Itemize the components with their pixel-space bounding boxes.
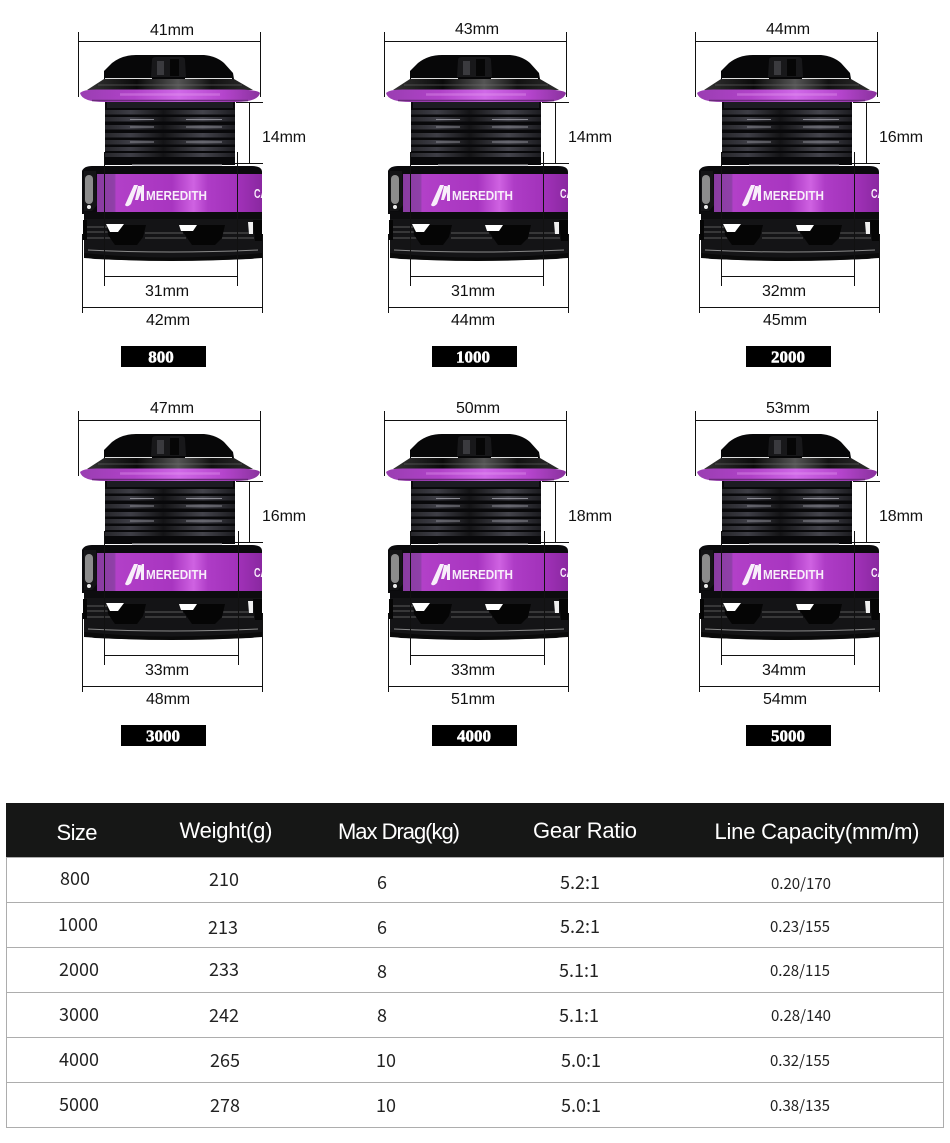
row 800: 0.20/170	[771, 873, 831, 894]
table header: Gear Ratio	[533, 818, 637, 843]
size badge	[432, 725, 517, 746]
brand text	[146, 189, 262, 200]
brand text: CA	[254, 186, 267, 201]
row 3000: 3000	[59, 1001, 99, 1027]
dimension labels	[145, 22, 306, 329]
brand text: CA	[871, 186, 884, 201]
dimension labels: 50mm	[456, 400, 500, 417]
row 800	[60, 865, 831, 895]
dimension labels: 34mm	[762, 662, 806, 679]
brand text: CA	[254, 565, 267, 580]
row 3000: 242	[209, 1002, 239, 1028]
brand text	[764, 568, 879, 579]
specification table	[6, 803, 944, 1128]
spool illustration 2000	[697, 55, 879, 261]
row 3000	[59, 1001, 831, 1028]
spool panel: size 5000	[696, 400, 923, 746]
row 4000	[59, 1046, 830, 1073]
size badge: 2000	[771, 348, 805, 366]
size badge: 3000	[146, 726, 180, 746]
dimension labels: 16mm	[262, 508, 306, 525]
row 5000: 5000	[59, 1091, 99, 1117]
spool illustration 1000	[386, 55, 568, 261]
dimension labels: 33mm	[451, 662, 495, 679]
dimension labels: 44mm	[766, 21, 810, 38]
dimension labels: 32mm	[762, 283, 806, 300]
brand text: MEREDITH	[763, 188, 824, 203]
row 3000: 8	[377, 1002, 387, 1028]
row 1000: 0.23/155	[770, 916, 830, 937]
row 5000: 278	[210, 1092, 240, 1118]
row 3000: 0.28/140	[771, 1005, 831, 1026]
brand text	[452, 189, 568, 200]
size badge: 800	[148, 348, 174, 366]
table header	[6, 803, 944, 857]
size badge	[121, 725, 206, 746]
dimension lines	[78, 32, 263, 313]
size badge: 4000	[457, 726, 491, 746]
brand text	[764, 189, 879, 200]
spool illustration 3000	[80, 434, 262, 640]
dimension labels: 44mm	[451, 312, 495, 329]
size badge	[746, 346, 831, 367]
dimension labels: 14mm	[568, 129, 612, 146]
dimension labels: 42mm	[146, 312, 190, 329]
brand text: CA	[560, 565, 573, 580]
dimension labels: 16mm	[879, 129, 923, 146]
brand text: MEREDITH	[452, 188, 513, 203]
table header: Size	[56, 820, 98, 845]
dimension labels: 41mm	[150, 22, 194, 39]
table header: Line Capacity(mm/m)	[714, 819, 920, 844]
table header: Weight(g)	[180, 818, 272, 843]
row 5000: 10	[376, 1092, 396, 1118]
row 5000	[59, 1091, 830, 1118]
dimension labels: 43mm	[455, 21, 499, 38]
dimension labels	[762, 21, 923, 329]
dimension labels: 54mm	[763, 691, 807, 708]
dimension lines	[696, 411, 880, 692]
dimension labels	[762, 400, 923, 708]
row 4000: 10	[376, 1047, 396, 1073]
size badge	[746, 725, 831, 746]
dimension lines	[384, 32, 569, 313]
row 4000: 0.32/155	[770, 1050, 830, 1071]
dimension labels: 31mm	[145, 283, 189, 300]
row 2000: 5.1:1	[559, 957, 599, 983]
dimension labels: 45mm	[763, 312, 807, 329]
brand text: MEREDITH	[146, 567, 207, 582]
dimension labels: 18mm	[879, 508, 923, 525]
spool illustration 800	[80, 55, 262, 261]
row 1000: 1000	[58, 911, 98, 937]
dimension lines	[696, 32, 880, 313]
row 1000: 6	[377, 914, 387, 940]
spool illustration 4000	[386, 434, 568, 640]
size badge	[432, 346, 517, 367]
brand text	[452, 568, 568, 579]
row 3000: 5.1:1	[559, 1002, 599, 1028]
spool panel: size 4000	[384, 400, 612, 746]
spool panel: size 1000	[384, 21, 612, 367]
spool panel: size 800	[78, 22, 306, 367]
dimension labels	[145, 400, 306, 708]
size badge: 1000	[456, 348, 490, 366]
row 2000: 233	[209, 956, 239, 982]
dimension labels: 53mm	[766, 400, 810, 417]
dimension labels: 51mm	[451, 691, 495, 708]
brand text: CA	[871, 565, 884, 580]
dimension labels: 14mm	[262, 129, 306, 146]
table header: Max Drag(kg)	[338, 819, 460, 844]
dimension labels: 18mm	[568, 508, 612, 525]
row 800: 6	[377, 869, 387, 895]
spool panel: size 3000	[78, 400, 306, 746]
dimension labels	[451, 400, 612, 708]
dimension lines	[78, 411, 263, 692]
brand text: MEREDITH	[146, 188, 207, 203]
row 4000: 265	[210, 1047, 240, 1073]
brand text: MEREDITH	[763, 567, 824, 582]
size badge	[121, 346, 206, 367]
row 800: 210	[209, 866, 239, 892]
row 1000: 213	[208, 914, 238, 940]
size badge: 5000	[771, 726, 805, 746]
row 1000	[58, 911, 830, 940]
row 4000: 5.0:1	[561, 1047, 601, 1073]
row 800: 800	[60, 865, 90, 891]
row 2000: 0.28/115	[770, 960, 830, 981]
row 1000: 5.2:1	[560, 913, 600, 939]
dimension labels: 47mm	[150, 400, 194, 417]
dimension labels	[451, 21, 612, 329]
dimension labels: 33mm	[145, 662, 189, 679]
brand text: CA	[560, 186, 573, 201]
spool illustration 5000	[697, 434, 879, 640]
row 2000	[59, 956, 830, 984]
row 4000: 4000	[59, 1046, 99, 1072]
dimension labels: 48mm	[146, 691, 190, 708]
row 2000: 2000	[59, 956, 99, 982]
brand text	[146, 568, 262, 579]
row 5000: 0.38/135	[770, 1095, 830, 1116]
brand text: MEREDITH	[452, 567, 513, 582]
row 800: 5.2:1	[560, 869, 600, 895]
dimension lines	[384, 411, 569, 692]
dimension labels: 31mm	[451, 283, 495, 300]
row 5000: 5.0:1	[561, 1092, 601, 1118]
row 2000: 8	[377, 958, 387, 984]
spool panel: size 2000	[696, 21, 923, 367]
